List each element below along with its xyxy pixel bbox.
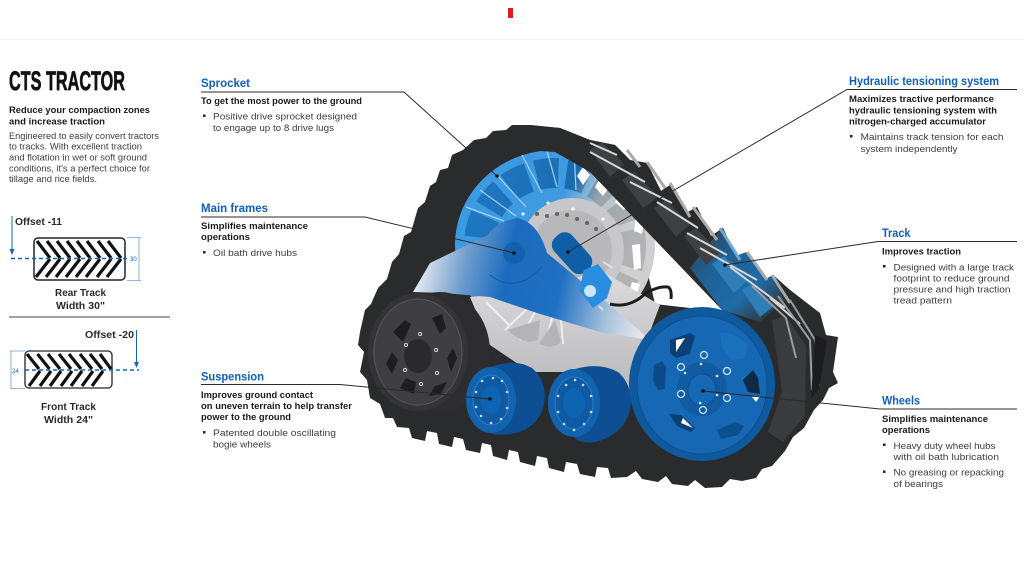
panel: hydraulic tensioning system	[566, 74, 1017, 254]
idler wheel	[368, 292, 490, 412]
suspension description: power to the ground	[201, 412, 291, 423]
wheels description: with oil bath lubrication	[892, 452, 999, 463]
track description: Improves traction	[882, 246, 961, 258]
illustration: CTS track system	[358, 125, 838, 488]
lower sprocket ribs	[486, 302, 563, 344]
front tread box	[25, 351, 112, 388]
main frames description: operations	[201, 232, 250, 243]
sprocket description: To get the most power to the ground	[201, 96, 362, 107]
sprocket description: to engage up to 8 drive lugs	[213, 123, 334, 134]
suspension description	[201, 390, 352, 450]
tread stripes	[590, 143, 800, 324]
subtitle: and increase traction	[9, 116, 105, 128]
suspension heading: Suspension	[201, 370, 264, 384]
main frames description	[201, 221, 308, 259]
track silhouette	[358, 125, 838, 488]
suspension leader line	[201, 384, 492, 401]
front track caption	[41, 402, 96, 426]
bogie wheel 2	[548, 366, 631, 442]
rear offset arrow	[10, 216, 14, 255]
hydraulic description: Maximizes tractive performance	[849, 94, 994, 105]
intro text: tillage and rice fields.	[9, 174, 97, 185]
track description	[882, 246, 1014, 306]
hydraulic description	[849, 94, 1004, 155]
track leader line	[723, 242, 1017, 267]
rear tread box	[34, 238, 125, 280]
intro text: Engineered to easily convert tractors	[9, 131, 159, 142]
title: CTS TRACTOR	[9, 66, 125, 96]
wheels heading: Wheels	[882, 394, 920, 408]
wheels description: of bearings	[894, 479, 943, 490]
hydraulic heading: Hydraulic tensioning system	[849, 74, 999, 88]
main frames leader line	[201, 217, 516, 255]
white gap behind sprocket	[630, 175, 725, 312]
suspension description: bogie wheels	[213, 440, 271, 450]
panel: introduction	[9, 66, 159, 185]
sprocket heading: Sprocket	[201, 76, 250, 90]
hydraulic description: system independently	[860, 144, 958, 155]
subtitle	[9, 105, 150, 128]
hydraulic description: hydraulic tensioning system with	[849, 106, 997, 116]
intro text	[9, 131, 159, 185]
hydraulic leader line	[566, 90, 1017, 254]
gray body	[470, 270, 660, 398]
suspension description: on uneven terrain to help transfer	[201, 401, 352, 412]
front offset arrow	[134, 330, 139, 368]
large front wheel	[629, 307, 775, 461]
wheels description: Heavy duty wheel hubs	[894, 441, 996, 452]
rear track caption: Rear Track	[55, 288, 106, 299]
tread lug edges	[627, 150, 790, 303]
intro text: to tracks. With excellent traction	[9, 142, 142, 152]
intro text: and flotation in wet or soft ground	[9, 152, 147, 164]
upper track band	[495, 125, 803, 330]
suspension description: Improves ground contact	[201, 390, 314, 401]
right track blocks	[752, 286, 827, 442]
track heading: Track	[882, 226, 911, 240]
wheels description	[882, 414, 1004, 490]
front track caption: Width 24"	[44, 415, 93, 426]
suspension description: Patented double oscillating	[213, 428, 336, 439]
panel: sprocket	[201, 76, 499, 178]
panel: wheels	[701, 389, 1017, 490]
wheels leader line	[701, 389, 1017, 409]
hydraulic description: nitrogen-charged accumulator	[849, 116, 986, 128]
sprocket description	[201, 96, 362, 134]
track description: footprint to reduce ground	[894, 274, 1010, 284]
tread blocks	[590, 142, 720, 265]
panel: main frames	[201, 201, 516, 259]
track description: tread pattern	[894, 296, 952, 306]
sprocket leader line	[201, 92, 499, 178]
main frames description: Simplifies maintenance	[201, 221, 308, 232]
front width dimension: 24	[12, 369, 19, 375]
panel: suspension	[201, 370, 492, 450]
rear width dimension: 30	[130, 257, 137, 263]
hydraulic accumulator	[548, 228, 613, 310]
hydraulic description: Maintains track tension for each	[860, 132, 1004, 143]
intro text: conditions, it's a perfect choice for	[9, 164, 151, 174]
diagram: rear track	[10, 216, 141, 312]
diagram: front track	[10, 330, 139, 426]
main frames heading: Main frames	[201, 201, 268, 215]
main frame	[413, 218, 650, 340]
track description: pressure and high traction	[894, 284, 1010, 296]
wheels description: No greasing or repacking	[894, 468, 1004, 478]
bogie wheel 1	[466, 363, 545, 435]
red top marker	[508, 8, 513, 18]
hydraulic hose	[610, 287, 671, 305]
subtitle: Reduce your compaction zones	[9, 105, 150, 116]
rear offset label: Offset -11	[15, 217, 62, 228]
front offset label: Offset -20	[85, 330, 134, 341]
sprocket description: Positive drive sprocket designed	[213, 112, 357, 122]
sprocket	[455, 150, 655, 340]
main frames description: Oil bath drive hubs	[213, 248, 297, 259]
rear track caption: Width 30"	[56, 301, 105, 312]
sprocket hub disc	[520, 198, 624, 302]
wheels description: Simplifies maintenance	[882, 414, 988, 425]
track description: Designed with a large track	[894, 262, 1014, 274]
wheels description: operations	[882, 425, 930, 436]
front track caption: Front Track	[41, 402, 96, 413]
blue tinted track section	[690, 228, 785, 322]
rear track caption	[55, 288, 106, 312]
panel: track	[723, 226, 1017, 306]
